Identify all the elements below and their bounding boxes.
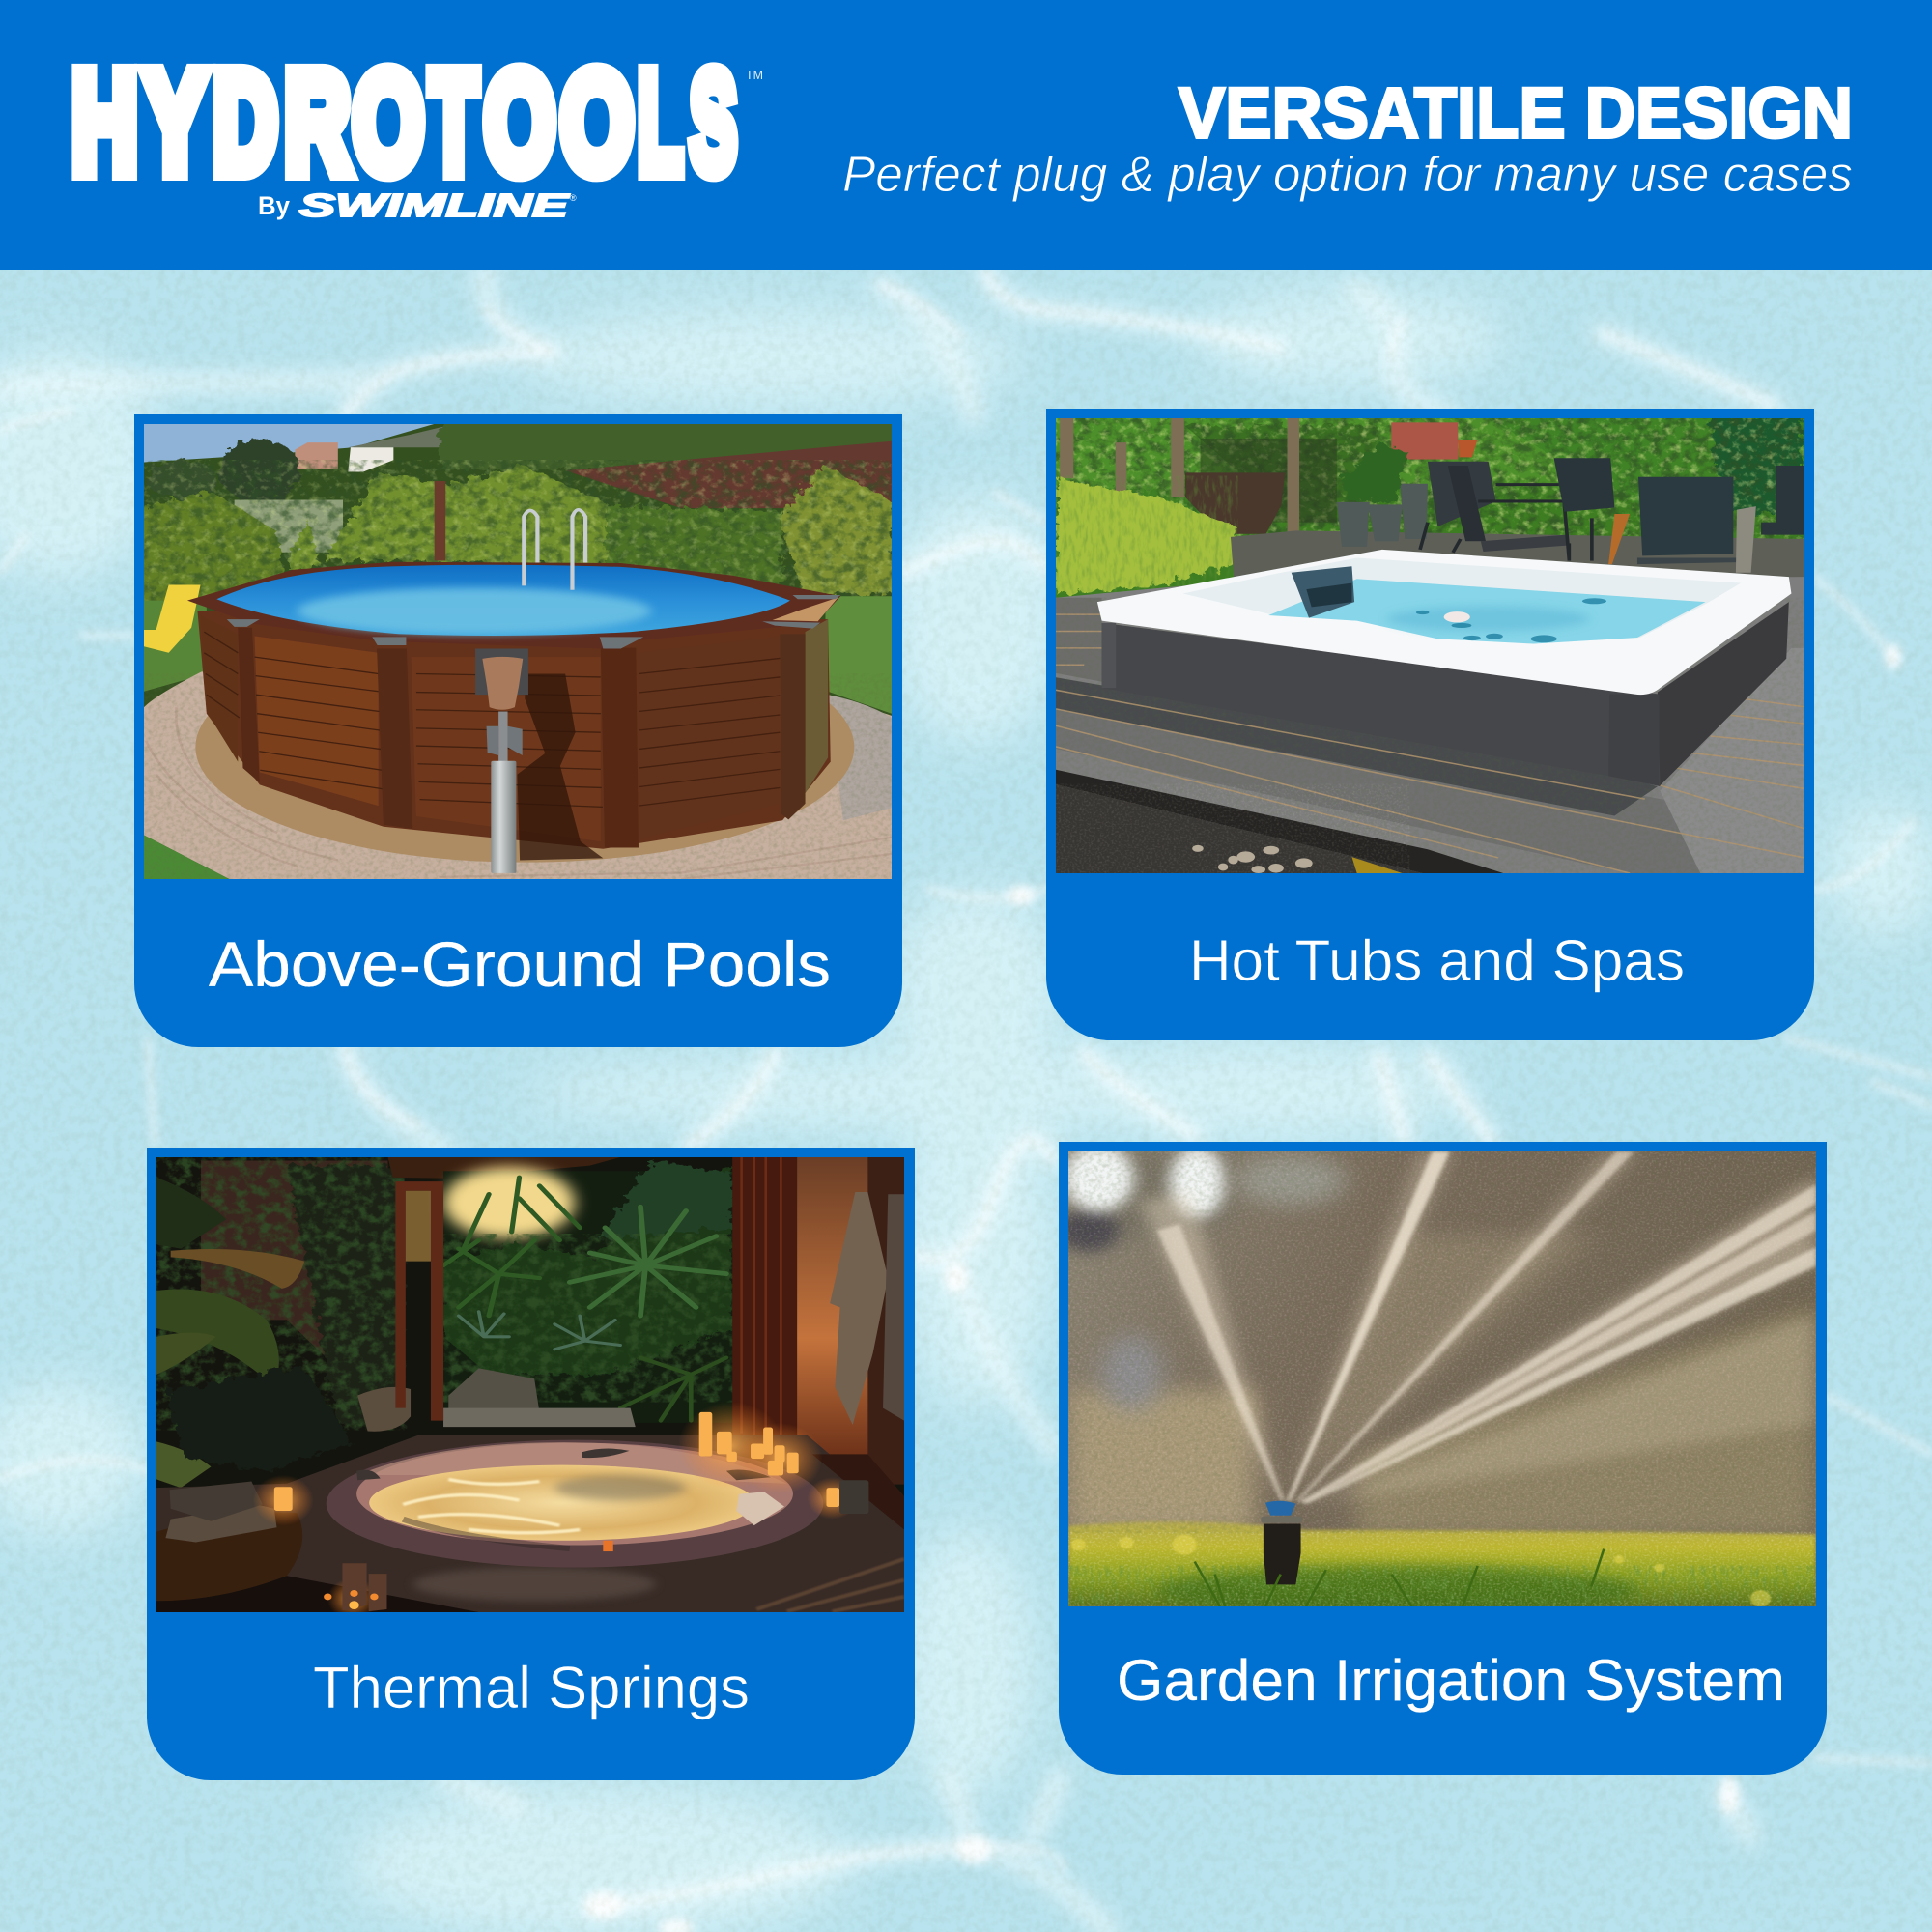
photo: lawn sprinkler [1068,1151,1816,1606]
rim brackets [227,595,840,648]
water jets [1139,1151,1816,1505]
pergola posts [1060,417,1299,549]
trees and hedges [141,418,898,603]
skimmer and pipe [475,648,528,873]
tropical leaves [156,1178,411,1488]
logo wordmark: O [485,43,554,202]
by swimline: By [258,191,290,220]
logo wordmark [71,43,736,202]
shower post [435,481,445,560]
panel: hot tubs and spas [1046,408,1814,1039]
panel: above-ground pools [134,414,902,1047]
stone floor [156,1435,904,1612]
by swimline: SWIMLINE [299,187,570,223]
shadow of skimmer [517,673,603,860]
blurred background [1059,1145,1816,1537]
lounge chair [144,585,201,653]
photo: wooden above-ground pool [144,424,892,879]
photo: square hot tub on deck [1056,418,1804,873]
caption: hot tubs and spas: Hot Tubs and Spas [1189,927,1685,993]
logo wordmark: O [560,43,634,202]
gravel ring [195,632,854,863]
ornamental grass [1056,475,1237,593]
logo: Hydrotools by Swimline: S [690,43,736,202]
logo wordmark: Y [144,43,207,202]
panel: thermal springs [147,1148,915,1780]
pool rim [187,562,840,648]
logo wordmark: H [71,43,137,202]
pool wall [197,611,831,849]
photo: candlelit spa tub [156,1157,904,1612]
by swimline: ® [570,193,577,203]
caption: garden irrigation system: Garden Irrigation System [1117,1648,1785,1713]
water mist fan [1068,1151,1816,1533]
pool water [216,565,790,636]
title: versatile design: VERSATILE DESIGN [1179,73,1853,153]
tub [327,1440,823,1568]
deck [1056,577,1804,873]
header band [0,0,1932,270]
logo wordmark: R [285,43,350,202]
ladder rails [524,510,585,590]
tub shell [1097,549,1791,695]
logo wordmark: T [430,43,477,202]
grass blades in front [1195,1549,1604,1606]
logo: Hydrotools by Swimline [71,43,763,223]
logo wordmark: L [638,43,682,202]
lawn [1068,1521,1816,1616]
towels and side table [156,1482,302,1601]
patio chairs [1420,458,1804,577]
garden backdrop [1049,412,1811,544]
logo wordmark: O [354,43,423,202]
gravel and stones [1056,769,1503,873]
door frame [395,1181,443,1421]
candles [253,1402,868,1620]
sprinkler head [1261,1501,1302,1584]
heading [842,73,1853,203]
tub cabinet [1102,602,1789,786]
left wall and vines [156,1157,404,1430]
by swimline [258,187,577,223]
jungle view through opening [443,1160,732,1427]
caption: thermal springs: Thermal Springs [313,1655,750,1720]
right column and wall [732,1157,904,1485]
subtitle: Perfect plug & play option for many use cases [842,147,1853,203]
trademark: TM [746,68,763,82]
caption: above-ground pools: Above-Ground Pools [209,928,831,1000]
lawn [144,596,892,714]
sky and distance [144,424,454,471]
logo wordmark: D [213,43,277,202]
paving [144,671,892,879]
planters [1337,483,1428,546]
patio ground [1231,530,1804,602]
ceiling beam [388,1157,620,1179]
panel: garden irrigation system [1059,1142,1827,1775]
